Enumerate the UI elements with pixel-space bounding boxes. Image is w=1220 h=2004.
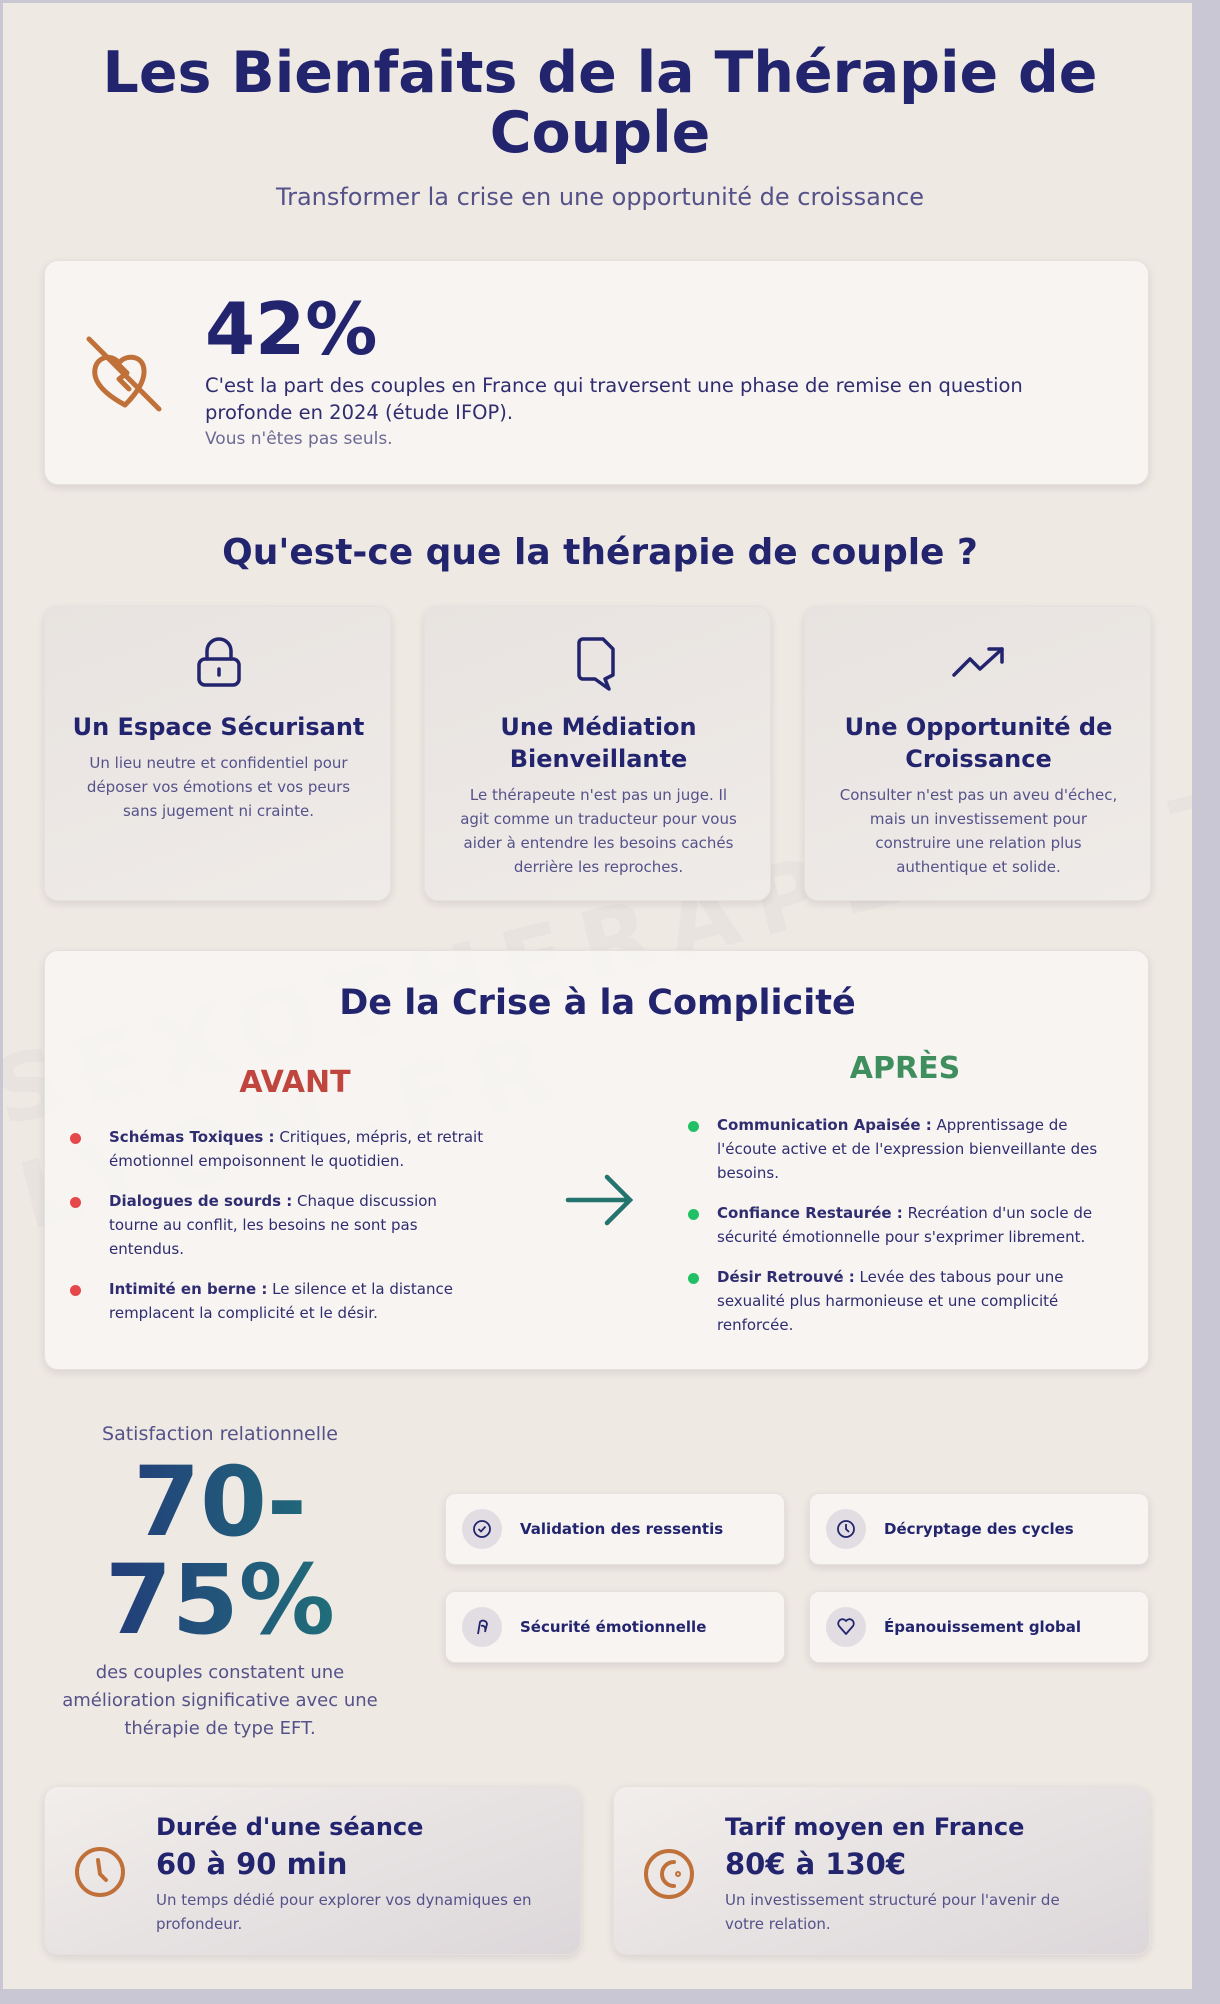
big number [50, 1453, 390, 1649]
icon [826, 1509, 866, 1549]
label: Satisfaction relationnelle [102, 1423, 338, 1445]
panel: espace sécurisant [44, 606, 391, 901]
icon: clock [75, 1847, 125, 1897]
card title [500, 713, 697, 773]
value: 80€ à 130€ [725, 1847, 906, 1881]
icon: trending up [952, 647, 1004, 677]
heading: De la Crise à la Complicité [339, 983, 856, 1023]
title: Couple [490, 100, 710, 166]
card text: Le thérapeute n'est pas un juge. Il agit comme un traducteur pour vous aider à entendre les besoins cachés derrière les reproches. [460, 786, 737, 876]
avant list: Dialogues de sourds : Chaque discussion tourne au conflit, les besoins ne sont pas entendus. [109, 1192, 437, 1258]
panel: stat 42% [44, 260, 1149, 485]
panel: durée [44, 1786, 581, 1955]
watermark: LYON.FR [9, 1012, 576, 1251]
value: 60 à 90 min [156, 1847, 347, 1881]
chip: sécurité [445, 1591, 785, 1663]
card title: Une Médiation [500, 713, 697, 741]
arrow [566, 1174, 634, 1226]
title: Durée d'une séance [156, 1813, 423, 1841]
card text: Consulter n'est pas un aveu d'échec, mais un investissement pour construire une relation plus authentique et solide. [840, 786, 1117, 876]
card title: Bienveillante [510, 745, 687, 773]
stat number: 42% [205, 287, 377, 371]
avant list: Schémas Toxiques : Critiques, mépris, et retrait émotionnel empoisonnent le quotidien. [109, 1128, 483, 1170]
chip: sécurité: Sécurité émotionnelle [520, 1618, 706, 1636]
panel: médiation [424, 606, 771, 901]
chip: validation: Validation des ressentis [520, 1520, 723, 1538]
title: Les Bienfaits de la Thérapie de [103, 40, 1097, 106]
icon: lock [197, 637, 241, 687]
icon: broken heart crossed [86, 336, 162, 412]
card title: Croissance [905, 745, 1052, 773]
panel: opportunité [804, 606, 1151, 901]
satisfaction stat [62, 1423, 378, 1739]
chip: validation [445, 1493, 785, 1565]
après list: Désir Retrouvé : Levée des tabous pour une sexualité plus harmonieuse et une complicité renforcée. [717, 1268, 1064, 1334]
title [103, 40, 1097, 166]
stat note: Vous n'êtes pas seuls. [205, 429, 393, 449]
big number: 75% [105, 1544, 335, 1656]
avant list: Intimité en berne : Le silence et la distance remplacent la complicité et le désir. [109, 1280, 453, 1322]
chip: épanouissement: Épanouissement global [884, 1618, 1081, 1636]
chip: épanouissement [809, 1591, 1149, 1663]
card title [845, 713, 1112, 773]
description: des couples constatent une amélioration significative avec une thérapie de type EFT. [62, 1662, 378, 1739]
icon: euro coin [644, 1849, 694, 1899]
card title: Une Opportunité de [845, 713, 1112, 741]
après list: Confiance Restaurée : Recréation d'un socle de sécurité émotionnelle pour s'exprimer librement. [717, 1204, 1092, 1246]
avant heading: AVANT [239, 1065, 351, 1100]
card title: Un Espace Sécurisant [73, 713, 364, 741]
heading: what is: Qu'est-ce que la thérapie de couple ? [222, 532, 978, 573]
desc: Un investissement structuré pour l'avenir de votre relation. [725, 1891, 1060, 1933]
big number: 70- [133, 1446, 307, 1558]
après list: Communication Apaisée : Apprentissage de l'écoute active et de l'expression bienveillante des besoins. [717, 1116, 1097, 1182]
avant list [70, 1128, 483, 1322]
après list [688, 1116, 1097, 1334]
icon: speech bubble [577, 637, 615, 691]
panel: tarif [613, 1786, 1150, 1955]
card text: Un lieu neutre et confidentiel pour déposer vos émotions et vos peurs sans jugement ni crainte. [87, 754, 350, 820]
title: Tarif moyen en France [725, 1813, 1024, 1841]
icon [462, 1607, 502, 1647]
panel: avant / après [44, 950, 1149, 1370]
icon [826, 1607, 866, 1647]
desc: Un temps dédié pour explorer vos dynamiques en profondeur. [156, 1891, 531, 1933]
icon [462, 1509, 502, 1549]
chip: décryptage [809, 1493, 1149, 1565]
stat text: C'est la part des couples en France qui traversent une phase de remise en question profonde en 2024 (étude IFOP). [205, 374, 1023, 424]
chip: décryptage: Décryptage des cycles [884, 1520, 1074, 1538]
subtitle: Transformer la crise en une opportunité de croissance [276, 183, 924, 211]
après heading: APRÈS [850, 1051, 960, 1086]
